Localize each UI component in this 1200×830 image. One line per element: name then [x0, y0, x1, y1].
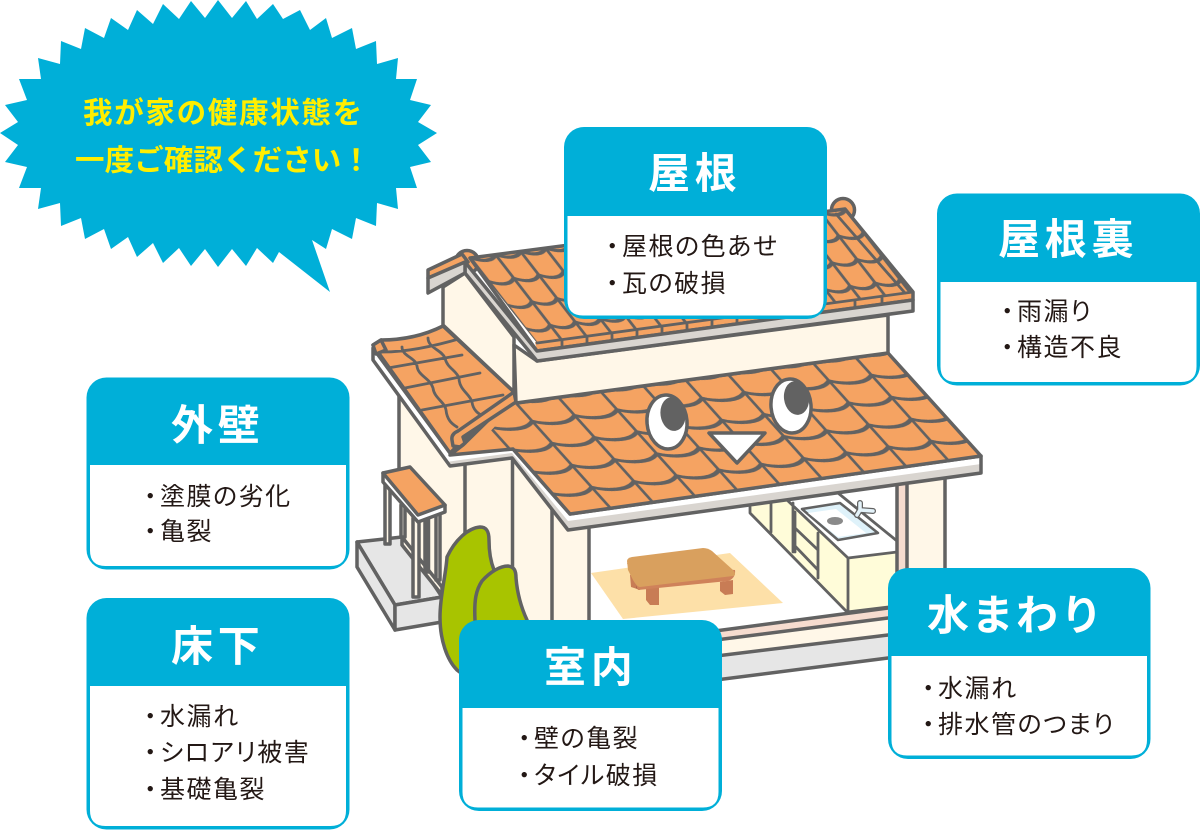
porch step [357, 537, 442, 630]
panel body [90, 686, 346, 826]
panel list: ・ [518, 762, 532, 790]
floor bands [700, 608, 888, 682]
panel list: ・ [144, 739, 158, 767]
panel: 水まわり [888, 568, 1150, 759]
main eave fascia [373, 348, 981, 530]
sink [802, 503, 878, 540]
back bush [440, 527, 520, 680]
main roof [450, 353, 981, 514]
lower walls [399, 385, 589, 660]
burst text line 1: 我が家の健康状態を [83, 96, 364, 130]
panel heading: 外壁 [171, 402, 265, 449]
left lower roof [373, 326, 514, 453]
panel body [940, 282, 1196, 382]
porch posts [385, 484, 442, 597]
panel list: ・ [1001, 298, 1015, 326]
panel list: 屋根の色あせ [622, 233, 778, 261]
nose [709, 433, 765, 463]
panel list: ・ [1001, 334, 1015, 362]
panel frame [459, 620, 722, 811]
gable strip [428, 254, 468, 278]
panel: 外壁 [86, 378, 350, 570]
rug [591, 553, 783, 619]
interior floor [589, 478, 897, 660]
panel: 屋根裏 [937, 194, 1200, 386]
panel frame [86, 378, 350, 570]
left eye [645, 393, 689, 451]
panel list: 構造不良 [1017, 334, 1123, 362]
panel heading: 屋根裏 [998, 216, 1138, 263]
table [627, 548, 735, 605]
panel list: 雨漏り [1017, 298, 1092, 326]
panel list: ・ [606, 233, 620, 261]
panel frame [888, 568, 1150, 759]
upper roof [470, 209, 913, 351]
panel body [90, 465, 346, 566]
panel list: ・ [922, 711, 936, 739]
panel: 室内 [459, 620, 722, 811]
panel list: ・ [144, 776, 158, 804]
panel list: 基礎亀裂 [160, 776, 266, 804]
panel list: 瓦の破損 [622, 270, 727, 298]
upper front wall [514, 315, 888, 403]
wall lines [399, 395, 589, 630]
panel body [462, 708, 718, 808]
roof end cap left [456, 250, 478, 274]
upper fascia [465, 262, 913, 361]
panel frame [937, 194, 1200, 386]
panel body [568, 216, 824, 316]
right pillar [897, 470, 945, 580]
panel heading: 屋根 [648, 150, 742, 197]
panel frame [564, 127, 827, 319]
speech burst [0, 0, 437, 292]
roof end cap right [832, 198, 854, 222]
burst text line 2: 一度ご確認ください！ [75, 144, 371, 178]
panel list: シロアリ被害 [160, 739, 310, 767]
panel body [892, 656, 1147, 756]
ridge cap [452, 392, 516, 447]
panel heading: 床下 [171, 623, 265, 670]
panel list: 水漏れ [160, 703, 240, 731]
panel list: 排水管のつまり [938, 711, 1115, 739]
panel list: 壁の亀裂 [534, 725, 639, 753]
panel heading: 水まわり [927, 592, 1105, 639]
panel list: タイル破損 [534, 762, 659, 790]
panel list: ・ [922, 675, 936, 703]
panel list: ・ [518, 725, 532, 753]
panel list: ・ [606, 270, 620, 298]
panel frame [86, 598, 350, 830]
panel: 床下 [86, 598, 350, 830]
front bush [475, 566, 530, 660]
porch roof [383, 467, 445, 522]
upper side wall [443, 273, 514, 392]
panel list: 亀裂 [160, 518, 213, 546]
panel list: ・ [144, 703, 158, 731]
kitchen cabinets [750, 493, 897, 612]
panel list: ・ [144, 483, 158, 511]
faucet [857, 503, 873, 515]
panel list: ・ [144, 518, 158, 546]
burst shape [0, 0, 437, 292]
panel list: 水漏れ [938, 675, 1018, 703]
house illustration [357, 198, 981, 682]
panel heading: 室内 [544, 644, 638, 691]
panel: 屋根 [564, 127, 827, 319]
panel list: 塗膜の劣化 [160, 483, 292, 511]
right eye [769, 377, 813, 435]
gable board [428, 262, 465, 293]
